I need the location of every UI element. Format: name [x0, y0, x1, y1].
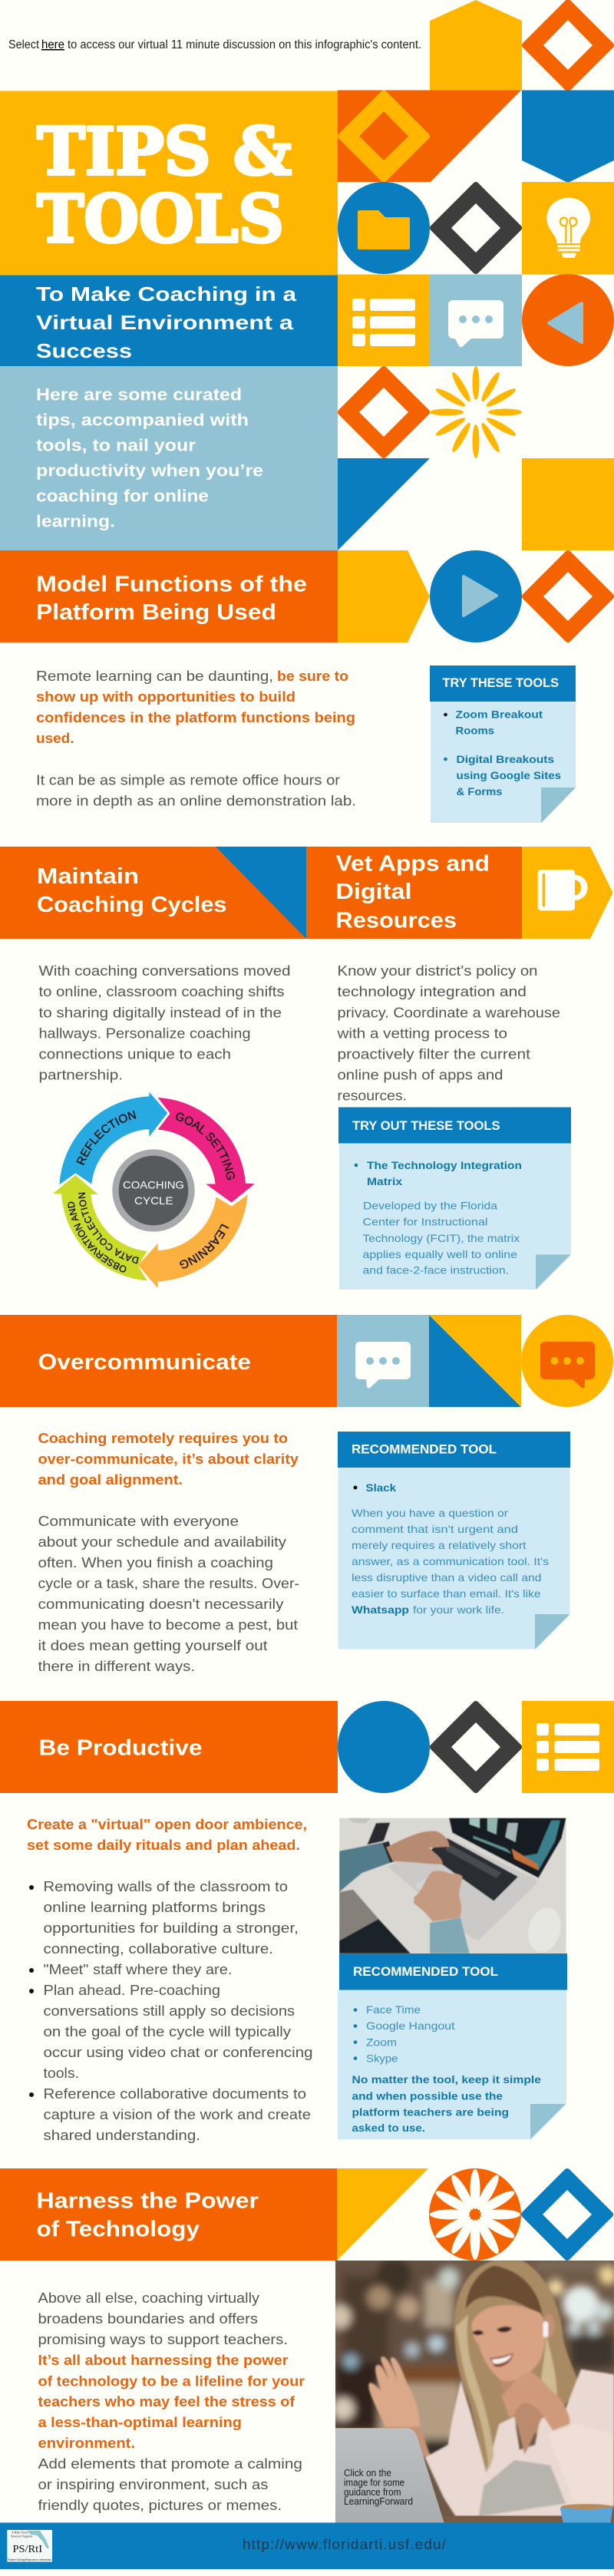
text: coaching cycles paragraph: to online, classroom coaching shifts [38, 984, 284, 999]
icon: chat bubble on light blue [337, 1315, 429, 1407]
text: overcommunicate paragraphs: Coaching remotely requires you to [38, 1431, 288, 1446]
panel: try these tools: Digital Breakouts [456, 753, 554, 765]
icon: rewind triangle on orange circle [522, 274, 614, 366]
panel: recommended tool slack: merely requires a relatively short [352, 1539, 527, 1551]
list: be productive tips: capture a vision of the work and create [43, 2107, 311, 2122]
panel: recommended tool slack: Slack [365, 1481, 396, 1494]
panel: recommended tool slack: comment that isn't urgent and [352, 1523, 518, 1535]
center: coaching cycle: CYCLE [134, 1194, 173, 1207]
hand at chin [502, 2372, 570, 2431]
arrow: learning: LEARNING [180, 1224, 229, 1269]
text: harness the power paragraph: broadens boundaries and offers [38, 2311, 258, 2327]
logo: PS/RtI [7, 2530, 52, 2562]
text: harness the power paragraph: promising ways to support teachers. [38, 2332, 288, 2347]
shape: yellow triangle [337, 2168, 428, 2261]
text: vet apps paragraph: proactively filter the current [338, 1047, 530, 1062]
text: remote learning: confidences in the platform functions being [36, 710, 355, 725]
logo: PS/RtI: PS/RtI [12, 2544, 42, 2555]
image: hands on laptop [339, 1818, 566, 1956]
text: overcommunicate paragraphs: Communicate with everyone [38, 1514, 239, 1529]
text: harness the power paragraph: Above all else, coaching virtually [38, 2290, 259, 2306]
panel: try out these tools: and face-2-face instruction. [362, 1263, 509, 1276]
list: be productive tips: shared understanding. [43, 2128, 200, 2143]
panel: recommended tool slack [338, 1432, 570, 1650]
section header: model functions [0, 550, 338, 642]
arrow: goal setting: GOAL SETTING [176, 1113, 235, 1181]
text: coaching cycles paragraph: partnership. [38, 1067, 123, 1082]
panel: recommended tool slack: for your work life. [413, 1603, 504, 1616]
panel: recommended tool slack: RECOMMENDED TOOL [352, 1442, 497, 1457]
text: remote learning: be sure to [277, 669, 348, 684]
text: coaching cycles paragraph [38, 963, 290, 1082]
title text [37, 114, 292, 258]
logo: PS/RtI: System of Supports [11, 2535, 33, 2538]
panel: try these tools: Rooms [456, 725, 494, 737]
icon: orange circle with petals [429, 2168, 521, 2261]
laptop [335, 2428, 444, 2523]
text: overcommunicate paragraphs: there in different ways. [38, 1659, 195, 1674]
arrow: reflection [59, 1091, 167, 1185]
footer band [0, 2522, 614, 2569]
panel: try these tools [430, 665, 576, 824]
text: overcommunicate paragraphs: cycle or a task, share the results. Over- [38, 1576, 299, 1591]
panel: recommended tool video chat: Zoom [366, 2036, 397, 2048]
panel: recommended tool video chat: asked to use. [352, 2122, 425, 2134]
text: harness the power paragraph: or inspiring environment, such as [38, 2477, 269, 2492]
text: coaching cycles paragraph: connections unique to each [38, 1047, 231, 1062]
text: coaching cycles paragraph: hallways. Personalize coaching [38, 1025, 250, 1041]
intro link text: Select [8, 38, 40, 51]
shape: top orange diamond [525, 2, 611, 88]
panel: try these tools: & Forms [456, 785, 503, 798]
shirt [425, 2370, 614, 2516]
section header: overcommunicate: Overcommunicate [38, 1350, 251, 1375]
section header: harness the power: Harness the Power [37, 2189, 259, 2214]
text: remote learning: used. [36, 731, 74, 746]
list: be productive tips: connecting, collaborative culture. [43, 1941, 273, 1957]
panel: try out these tools: The Technology Integration [367, 1159, 522, 1171]
image caption: Click on the [344, 2467, 391, 2479]
waving hand [368, 2356, 420, 2427]
panel: try out these tools: Technology (FCIT), the matrix [362, 1232, 520, 1244]
section header: harness the power [0, 2168, 337, 2261]
hair front [540, 2335, 558, 2396]
panel: recommended tool video chat: Face Time [366, 2003, 421, 2016]
image caption: image for some [344, 2476, 404, 2488]
panel: try these tools: Zoom Breakout [456, 708, 543, 720]
section header: harness the power: of Technology [37, 2217, 200, 2241]
panel: try out these tools: TRY OUT THESE TOOLS [352, 1118, 500, 1133]
intro panel [0, 366, 338, 550]
neck [499, 2373, 543, 2455]
section header: model functions: Model Functions of the [36, 573, 307, 597]
intro panel: learning. [36, 511, 115, 531]
image caption [344, 2467, 413, 2507]
text: remote learning [36, 669, 356, 809]
text: vet apps paragraph: Know your district's policy on [338, 963, 537, 979]
icon: play button [430, 550, 522, 642]
text: overcommunicate paragraphs: mean you have to become a pest, but [38, 1617, 298, 1633]
chart: coaching cycle diagram [53, 1091, 255, 1288]
text: harness the power paragraph: It’s all about harnessing the power [38, 2353, 289, 2368]
intro panel: tips, accompanied with [36, 410, 249, 430]
face [471, 2305, 546, 2381]
panel: recommended tool video chat: Google Hangout [366, 2020, 455, 2032]
text: overcommunicate paragraphs [38, 1431, 299, 1674]
icon: list on yellow [522, 1701, 614, 1793]
panel: recommended tool video chat [338, 1953, 567, 2140]
list: be productive tips: on the goal of the cycle will typically [43, 2024, 291, 2039]
image: woman waving at laptop [328, 2258, 614, 2523]
panel: recommended tool video chat: No matter the tool, keep it simple [352, 2073, 541, 2086]
icon: list on yellow square [338, 275, 430, 366]
subtitle band: Virtual Environment a [36, 311, 294, 334]
text: be productive lead: set some daily rituals and plan ahead. [27, 1838, 300, 1853]
panel: recommended tool video chat: RECOMMENDED TOOL [353, 1964, 498, 1979]
section header: maintain coaching cycles and vet apps: Coaching Cycles [37, 893, 227, 917]
panel: recommended tool slack: answer, as a communication tool. It's [352, 1555, 549, 1567]
text: remote learning: more in depth as an online demonstration lab. [36, 794, 356, 809]
intro panel: coaching for online [36, 487, 209, 505]
shape: yellow arrow [338, 550, 430, 642]
list: be productive tips: opportunities for building a stronger, [43, 1920, 299, 1936]
panel: recommended tool video chat: Skype [366, 2053, 398, 2065]
text: vet apps paragraph [336, 963, 560, 1104]
arrow: reflection: REFLECTION [76, 1110, 137, 1165]
list: be productive tips: occur using video chat or conferencing [43, 2045, 313, 2060]
intro panel: productivity when you’re [36, 461, 263, 481]
text: overcommunicate paragraphs: often. When you finish a coaching [38, 1555, 273, 1570]
list: be productive tips: Plan ahead. Pre-coaching [43, 1983, 220, 1998]
subtitle band: To Make Coaching in a [36, 282, 297, 305]
shape: blue diamond [524, 2171, 610, 2257]
text: harness the power paragraph [38, 2290, 305, 2513]
shape: blue circle [338, 1701, 430, 1793]
icon: light bulb on yellow square [522, 182, 614, 275]
arrow: observation and data collection: OBSERVATION AND [68, 1202, 126, 1273]
list: be productive tips: online learning platforms brings [43, 1900, 266, 1915]
panel: try out these tools: Developed by the Florida [363, 1199, 497, 1211]
shape: yellow square [522, 458, 614, 550]
title text: TOOLS [37, 181, 284, 258]
panel: recommended tool slack: When you have a question or [352, 1507, 508, 1519]
center: coaching cycle: COACHING [123, 1179, 184, 1191]
title block [0, 91, 338, 275]
intro panel: Here are some curated [36, 385, 242, 404]
text: harness the power paragraph: environment. [38, 2436, 135, 2451]
text: remote learning: show up with opportunities to build [36, 689, 295, 705]
shape: blue triangle [338, 458, 430, 550]
panel: try out these tools: applies equally well to online [362, 1248, 517, 1260]
footer url: http://www.floridarti.usf.edu/ [243, 2537, 447, 2552]
shape: blue pentagon [522, 91, 614, 183]
list: be productive tips [29, 1879, 313, 2143]
hair back [454, 2261, 581, 2483]
intro panel: tools, to nail your [36, 436, 196, 454]
text: remote learning: It can be as simple as remote office hours or [36, 772, 340, 788]
section header: overcommunicate [0, 1315, 337, 1407]
list: be productive tips: Reference collaborative documents to [43, 2086, 306, 2102]
icon: folder on blue circle [338, 182, 430, 274]
shape: top yellow pentagon [430, 0, 522, 91]
arrow: goal setting [158, 1098, 255, 1203]
text: overcommunicate paragraphs: communicating doesn't necessarily [38, 1597, 284, 1612]
image caption: LearningForward [344, 2495, 413, 2507]
panel: try out these tools: Center for Instructional [362, 1216, 488, 1228]
list: be productive tips: tools. [43, 2066, 79, 2081]
panel: recommended tool video chat: and when possible use the [352, 2089, 503, 2102]
text: coaching cycles paragraph: to sharing digitally instead of in the [38, 1006, 282, 1021]
subtitle band: Success [36, 339, 132, 362]
text: overcommunicate paragraphs: about your schedule and availability [38, 1534, 286, 1550]
section header: be productive: Be Productive [38, 1736, 203, 1761]
icon: yellow sunburst [430, 366, 522, 458]
text: be productive lead [27, 1817, 307, 1853]
arrow: observation and data collection [53, 1175, 147, 1280]
shape: orange diamond [525, 553, 611, 639]
shape: orange diamond [341, 369, 427, 455]
text: harness the power paragraph: of technology to be a lifeline for your [38, 2373, 305, 2389]
text: remote learning: Remote learning can be daunting, [36, 669, 273, 684]
text: vet apps paragraph: online push of apps and [338, 1067, 503, 1082]
section header: be productive [0, 1701, 338, 1793]
arrow: learning [138, 1194, 248, 1288]
panel: try these tools: TRY THESE TOOLS [442, 675, 559, 690]
shape: dark diamond [433, 185, 519, 271]
panel: recommended tool slack: easier to surface than email. It's like [352, 1587, 541, 1600]
icon: chat bubble on light blue square [430, 275, 522, 366]
shape: dark diamond [433, 1704, 519, 1790]
section header: maintain coaching cycles and vet apps: Maintain [37, 864, 139, 889]
text: vet apps paragraph: technology integration and [338, 984, 527, 999]
list: be productive tips: Removing walls of the classroom to [43, 1879, 288, 1894]
image caption: guidance from [344, 2486, 401, 2498]
section header: maintain coaching cycles and vet apps: Resources [336, 909, 457, 933]
text: overcommunicate paragraphs: and goal alignment. [38, 1472, 183, 1488]
section header: maintain coaching cycles and vet apps [0, 847, 522, 939]
panel: try these tools: using Google Sites [456, 769, 561, 781]
panel: recommended tool video chat: platform teachers are being [352, 2106, 509, 2119]
intro link text: to access our virtual 11 minute discussion on this infographic's content. [68, 38, 421, 51]
text: harness the power paragraph: Add elements that promote a calming [38, 2456, 302, 2472]
intro link text: here [41, 38, 64, 51]
text: overcommunicate paragraphs: it does mean getting yourself out [38, 1638, 267, 1653]
center: coaching cycle [112, 1149, 195, 1232]
shape: blue and yellow triangles [429, 1315, 521, 1407]
title text: TIPS & [37, 114, 292, 190]
text: vet apps paragraph: with a vetting process to [336, 1025, 507, 1041]
text: vet apps paragraph: privacy. Coordinate a warehouse [338, 1006, 560, 1021]
panel: try out these tools [338, 1107, 571, 1290]
logo: PS/RtI: A Multi-Tiered [12, 2531, 28, 2535]
list: be productive tips: conversations still apply so decisions [43, 2003, 295, 2019]
text: overcommunicate paragraphs: over-communicate, it’s about clarity [38, 1451, 299, 1467]
sleeve and table [548, 2424, 614, 2504]
panel: try out these tools: Matrix [367, 1175, 402, 1187]
text: coaching cycles paragraph: With coaching conversations moved [38, 963, 290, 979]
icon: mug on yellow arrow [522, 847, 612, 939]
coffee cup [560, 2504, 613, 2523]
text: harness the power paragraph: friendly quotes, pictures or memes. [38, 2498, 282, 2513]
section header: maintain coaching cycles and vet apps: Vet Apps and [336, 852, 490, 877]
shape: orange parallelogram with yellow diamond [338, 91, 521, 182]
subtitle band [0, 275, 338, 366]
logo: PS/RtI: Problem Solving/Response to Intervention [8, 2558, 51, 2561]
text: vet apps paragraph: resources. [338, 1088, 407, 1104]
text: be productive lead: Create a "virtual" open door ambience, [27, 1817, 307, 1832]
icon: orange chat bubble on yellow circle [521, 1315, 613, 1407]
section header: model functions: Platform Being Used [36, 600, 276, 625]
arrow: observation and data collection: DATA COLLECTION [78, 1193, 139, 1264]
text: harness the power paragraph: teachers who may feel the stress of [38, 2394, 295, 2409]
panel: recommended tool slack: Whatsapp [352, 1603, 409, 1616]
section header: maintain coaching cycles and vet apps: Digital [336, 880, 411, 904]
panel: recommended tool slack: less disruptive than a video call and [352, 1571, 542, 1584]
text: harness the power paragraph: a less-than-optimal learning [38, 2415, 242, 2430]
list: be productive tips: "Meet" staff where they are. [43, 1962, 232, 1977]
